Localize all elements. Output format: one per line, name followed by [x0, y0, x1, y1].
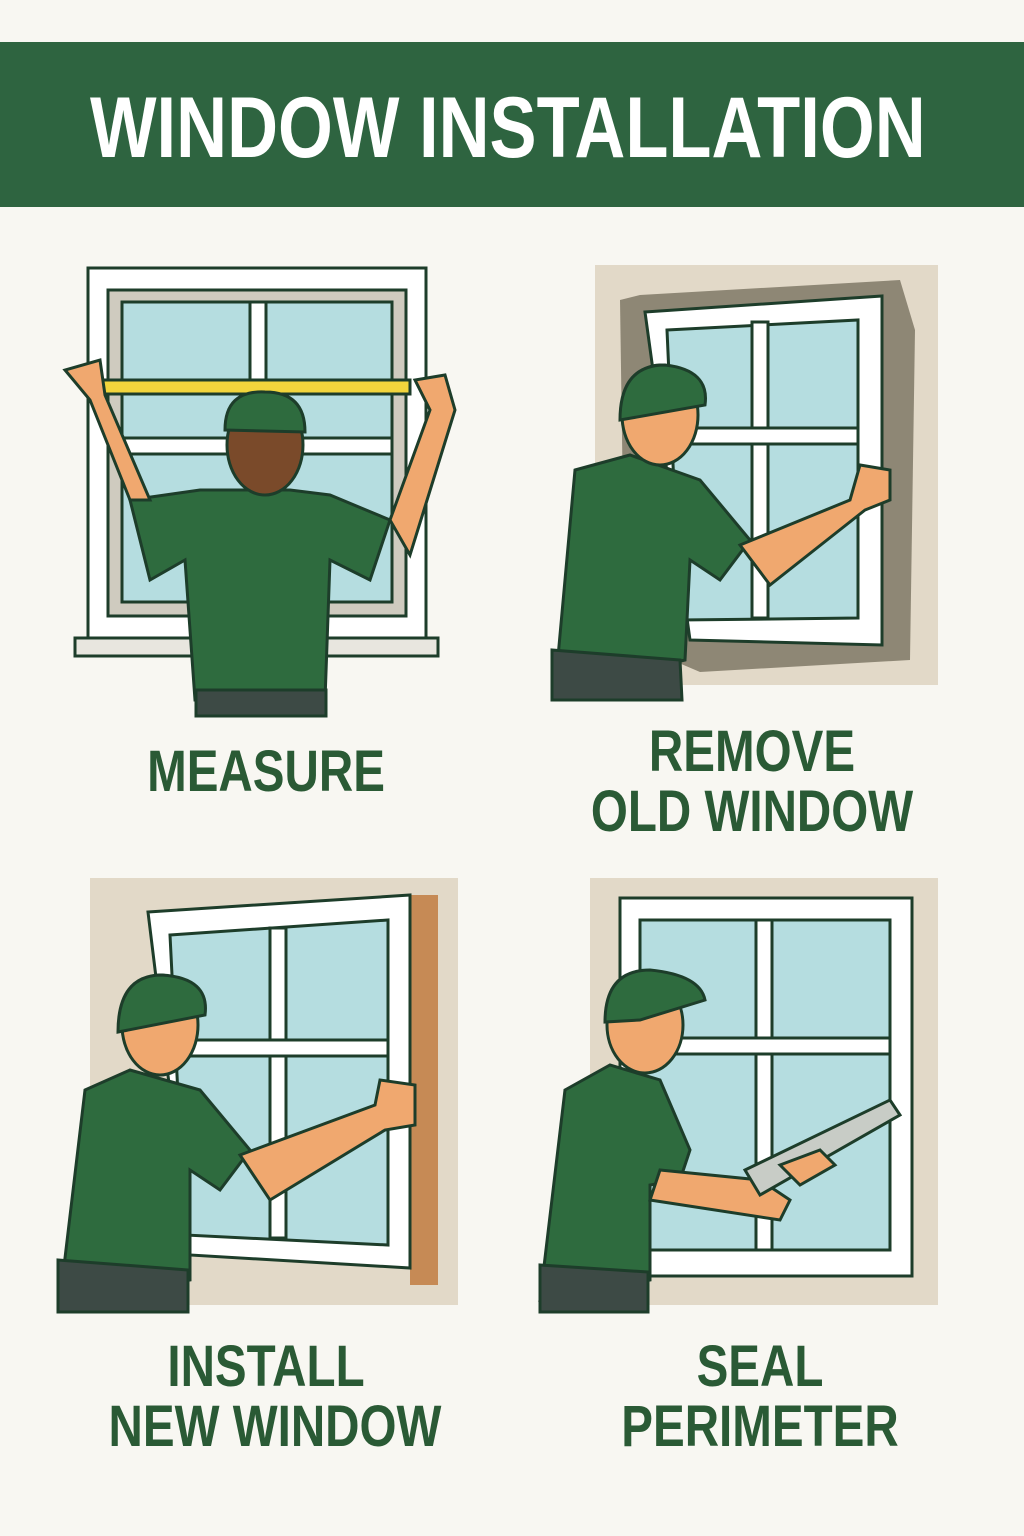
label: seal perimeter — [621, 1334, 899, 1459]
label: remove old window: OLD WINDOW — [591, 779, 913, 844]
label: remove old window — [591, 719, 914, 844]
label: remove old window: REMOVE — [649, 719, 855, 784]
label: install new window — [109, 1334, 442, 1459]
label: install new window: NEW WINDOW — [109, 1394, 441, 1459]
panel: measure illustration — [65, 268, 455, 716]
label: install new window: INSTALL — [167, 1334, 365, 1399]
label: seal perimeter: SEAL — [697, 1334, 823, 1399]
panel: remove old window illustration — [552, 265, 938, 700]
title: WINDOW INSTALLATION — [90, 80, 926, 176]
title — [0, 42, 1024, 207]
label: seal perimeter: PERIMETER — [621, 1394, 899, 1459]
label: measure: MEASURE — [147, 739, 385, 804]
panel: install new window illustration — [58, 878, 458, 1312]
panel: seal perimeter illustration — [540, 878, 938, 1312]
